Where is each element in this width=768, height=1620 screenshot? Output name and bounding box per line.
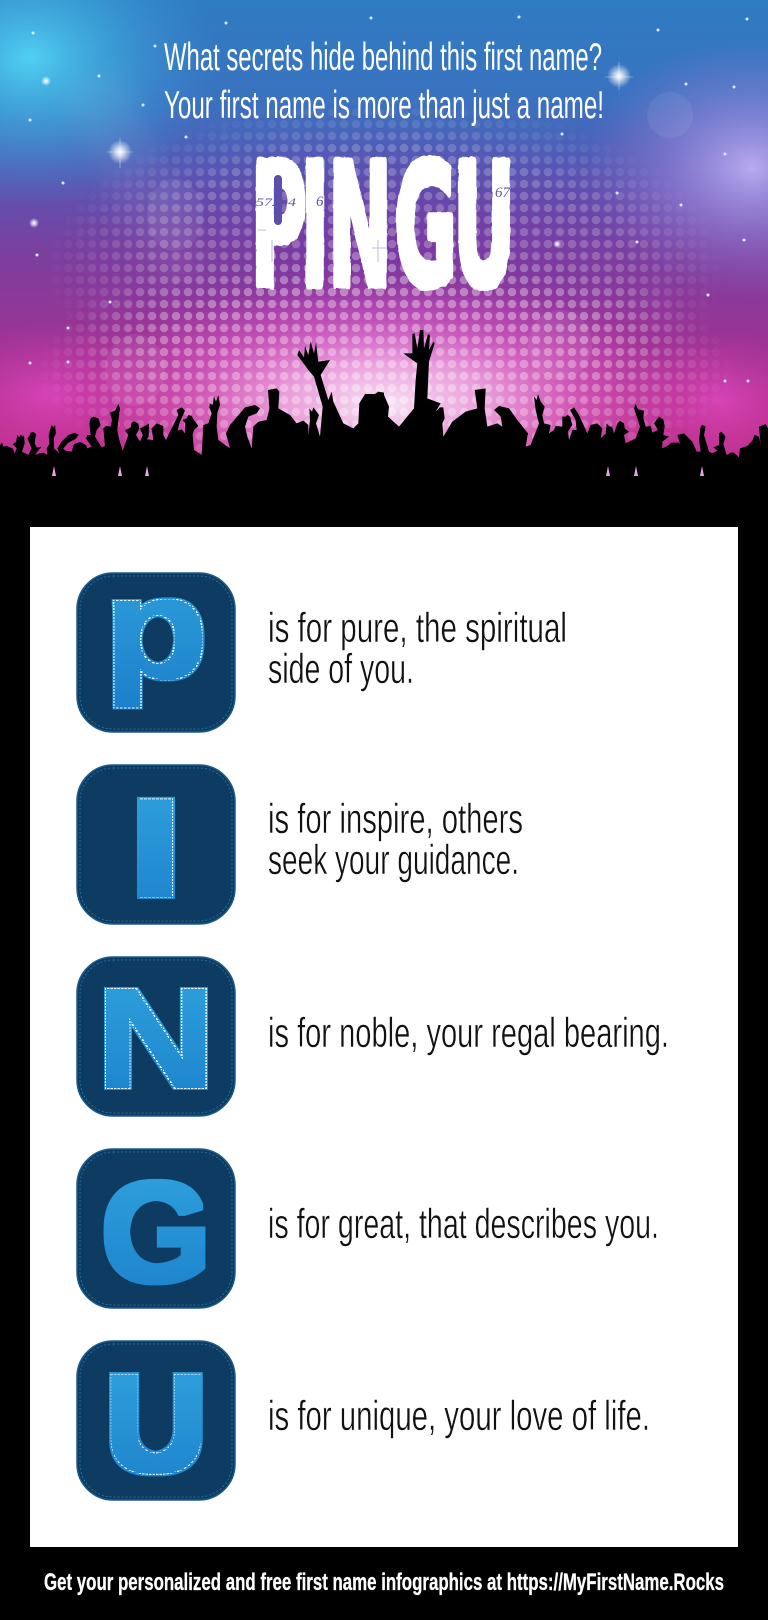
icon: badge G [77,1149,235,1312]
crowd silhouette [0,330,768,528]
icon: badge P [77,549,235,732]
text: P meaning: is for pure, the spiritual [268,604,567,651]
name title PINGU: 57234 [256,195,296,209]
text: I meaning: seek your guidance. [268,836,519,883]
row: letter P [77,549,567,732]
icon: badge G: G [101,1153,211,1312]
icon: badge U [77,1341,235,1500]
icon: badge I [77,765,235,924]
name title PINGU: 67 [495,185,512,201]
row: letter G [77,1149,659,1312]
text: I meaning: is for inspire, others [268,795,523,842]
sparkles [28,16,750,382]
name title PINGU: 6 [316,194,324,210]
text: P meaning: side of you. [268,645,414,692]
name title PINGU: PINGU [251,129,515,326]
icon: badge N: N [96,959,216,1117]
row: letter I [77,765,523,924]
icon: badge P: p [104,549,208,708]
row: letter U [77,1341,650,1500]
row: letter N [77,957,669,1117]
icon: badge U: U [106,1349,206,1500]
white content panel [30,527,738,1547]
hero background [0,0,768,458]
icon: badge I: I [132,772,180,922]
text: P meaning [268,604,567,692]
text: I meaning [268,795,523,883]
